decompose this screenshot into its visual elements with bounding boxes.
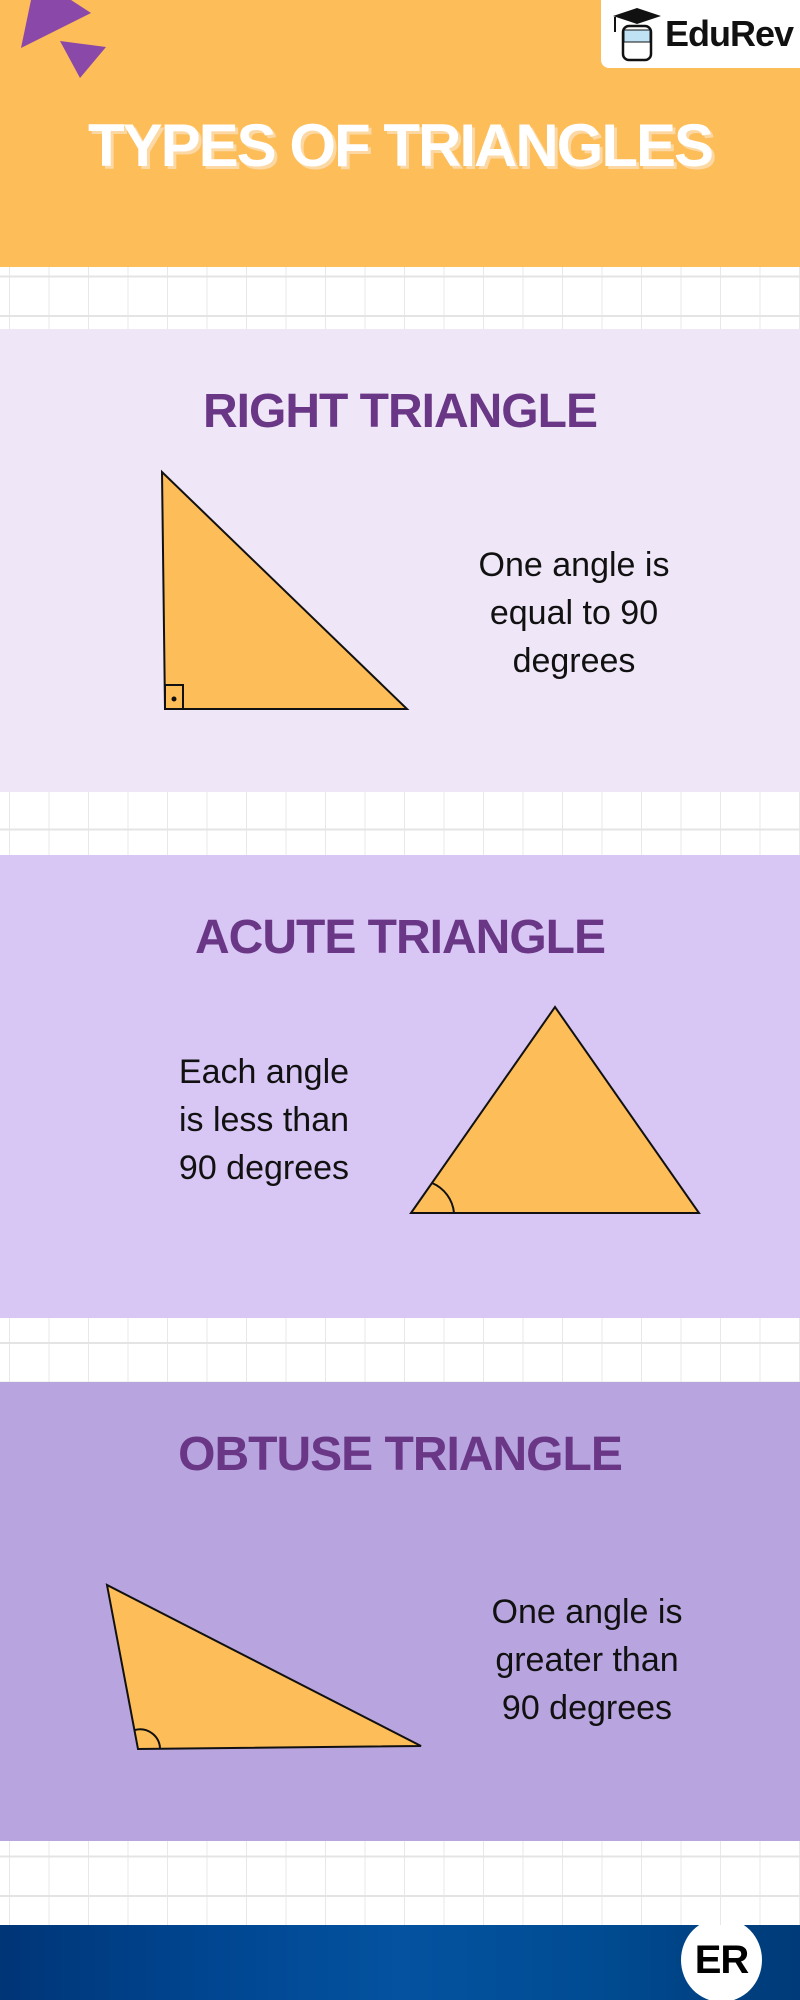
text: right definition: equal to 90 [490,594,658,632]
header band [0,0,800,267]
icon: acute triangle [409,1005,701,1214]
text: acute definition [179,1053,349,1187]
heading: right triangle: RIGHT TRIANGLE [203,385,597,438]
panel: right triangle [0,329,800,792]
text: right definition: One angle is [479,546,669,584]
panel: acute triangle [0,855,800,1318]
text: right definition [479,546,669,680]
text: obtuse definition [492,1593,682,1727]
icon: right triangle [160,470,410,710]
logo: ER circle [681,1918,762,2000]
logo: ER circle: ER [695,1938,748,1982]
icon: obtuse triangle [106,1583,422,1750]
title: TYPES OF TRIANGLES [88,112,712,179]
decorative purple triangles [21,0,106,78]
heading: obtuse triangle: OBTUSE TRIANGLE [178,1428,622,1481]
text: acute definition: 90 degrees [179,1149,349,1187]
text: right definition: degrees [513,642,635,680]
text: acute definition: Each angle [179,1053,349,1091]
logo: EduRev: EduRev [665,13,793,54]
heading: acute triangle: ACUTE TRIANGLE [195,911,605,964]
footer band [0,1925,800,2000]
text: acute definition: is less than [179,1101,349,1139]
logo: EduRev [601,0,800,68]
panel: obtuse triangle [0,1382,800,1841]
text: obtuse definition: 90 degrees [502,1689,672,1727]
text: obtuse definition: One angle is [492,1593,682,1631]
text: obtuse definition: greater than [495,1641,679,1679]
